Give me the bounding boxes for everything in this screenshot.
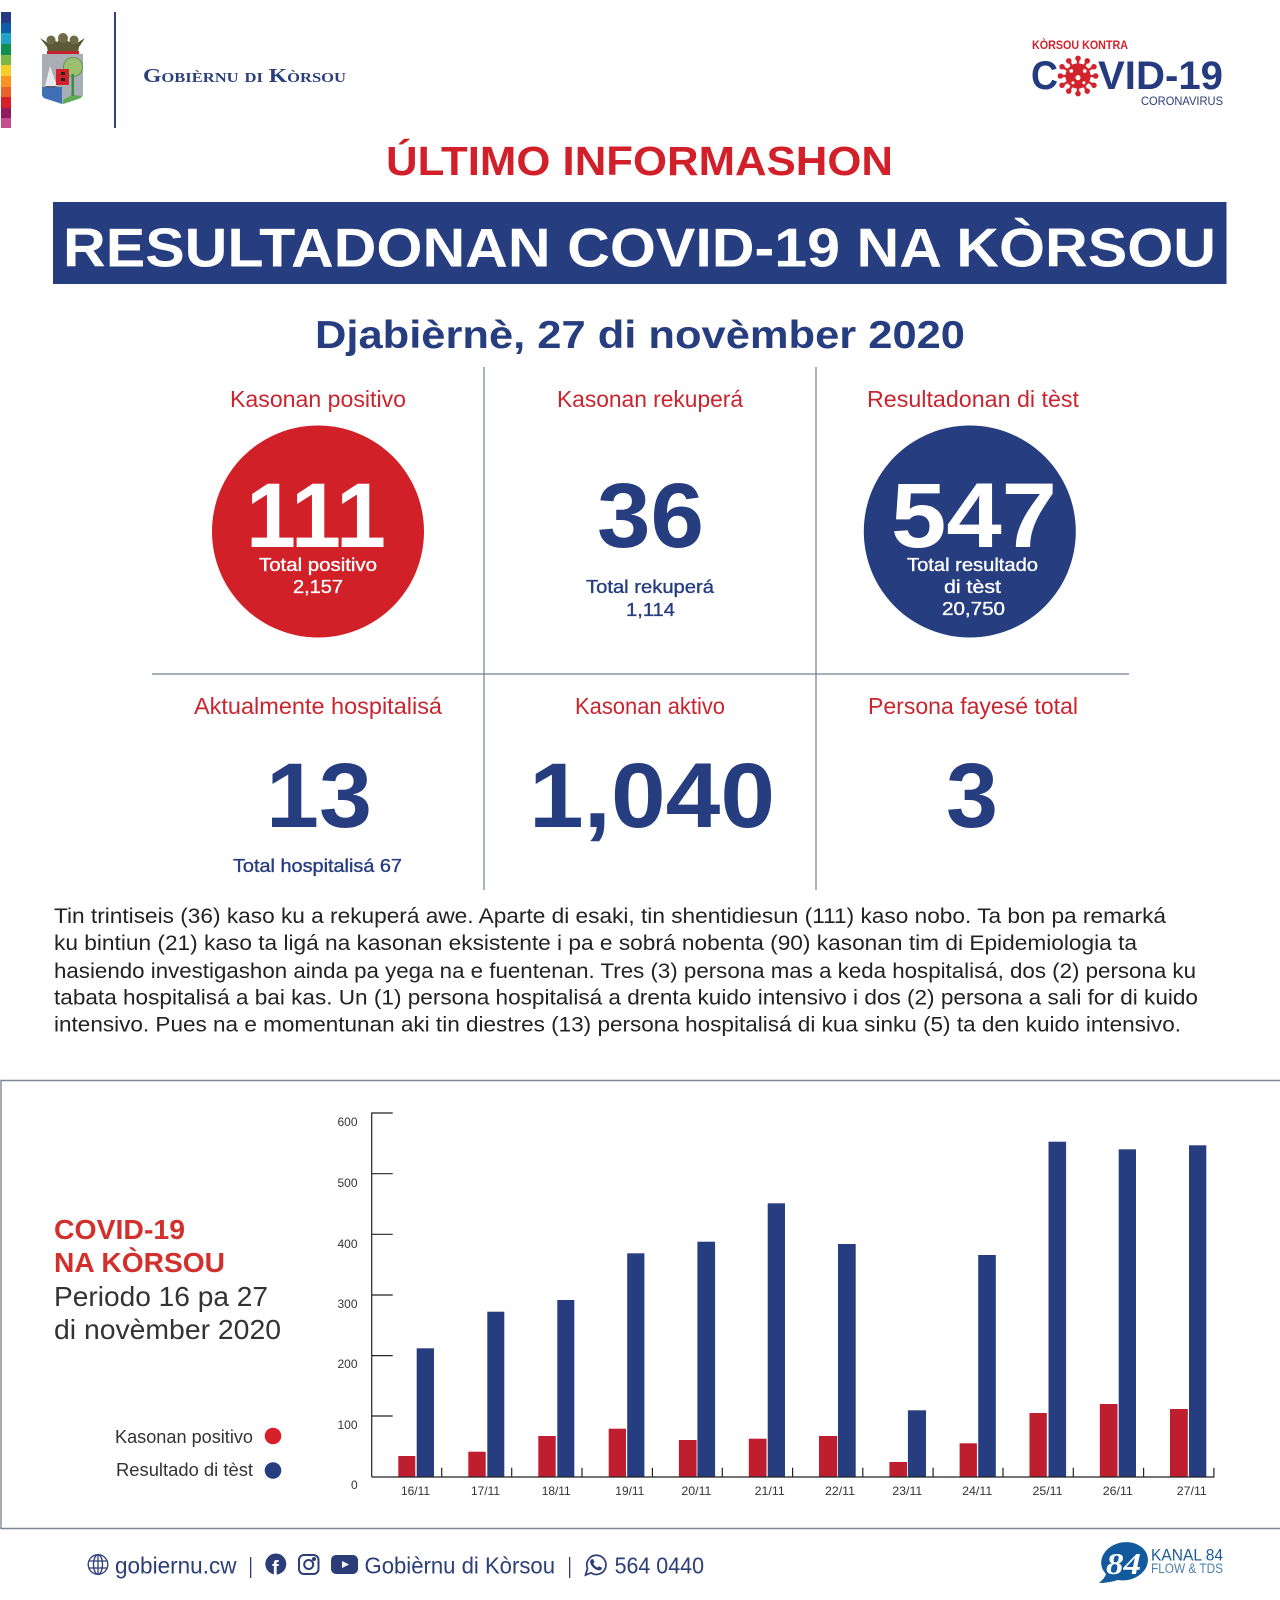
x axis labels: 19/11 <box>615 1484 645 1498</box>
icon: virus <box>1058 56 1098 96</box>
legend <box>115 1427 281 1480</box>
icon: youtube <box>331 1555 358 1574</box>
y axis labels: 400 <box>338 1237 358 1251</box>
y axis labels: 200 <box>338 1357 358 1371</box>
x axis labels: 26/11 <box>1103 1484 1133 1498</box>
stat: resultadonan di tèst: Total resultado <box>907 555 1038 575</box>
logo: Kanal 84: FLOW & TDS <box>1151 1561 1223 1576</box>
chart heading: COVID-19 <box>54 1214 185 1245</box>
x axis labels: 23/11 <box>892 1484 923 1498</box>
logo: Kanal 84 <box>1099 1542 1223 1583</box>
stat: kasonan aktivo: 1,040 <box>529 745 775 847</box>
x axis labels: 16/11 <box>401 1484 430 1498</box>
phone number: 564 0440 <box>615 1552 704 1578</box>
stat: kasonan positivo: 111 <box>246 465 386 567</box>
y axis labels: 0 <box>351 1478 358 1492</box>
legend: Resultado di tèst <box>116 1460 253 1480</box>
stat: persona fayesé total: 3 <box>946 745 998 847</box>
x axis labels: 25/11 <box>1032 1484 1063 1498</box>
summary paragraph: ku bintiun (21) kaso ta ligá na kasonan eksistente i pa e sobrá nobenta (90) kasonan tim di Epidemiologia ta <box>54 932 1137 955</box>
x axis labels: 22/11 <box>825 1484 855 1498</box>
stat: kasonan rekuperá: Total rekuperá <box>586 577 715 597</box>
footer contacts <box>88 1552 704 1580</box>
icon: whatsapp <box>586 1555 606 1575</box>
stat: kasonan positivo: 2,157 <box>293 577 343 597</box>
chart heading: di novèmber 2020 <box>54 1314 281 1345</box>
x axis labels: 27/11 <box>1177 1484 1207 1498</box>
stat: kasonan aktivo: Kasonan aktivo <box>575 693 725 719</box>
y axis <box>372 1112 393 1477</box>
icon: globe <box>88 1555 108 1574</box>
x axis labels: 18/11 <box>542 1484 571 1498</box>
stat grid lines <box>152 367 1129 890</box>
x axis labels: 21/11 <box>755 1484 785 1498</box>
summary paragraph <box>54 905 1198 1036</box>
icon: facebook <box>265 1554 286 1580</box>
bars: kasonan positivo <box>398 1404 1188 1477</box>
stat: resultadonan di tèst: 547 <box>891 465 1057 567</box>
stat: aktualmente hospitalisá: Total hospitalisá 67 <box>233 856 402 876</box>
x axis labels <box>401 1484 1207 1498</box>
banner: RESULTADONAN COVID-19 NA KÒRSOU <box>63 216 1216 278</box>
stat: resultadonan di tèst: 20,750 <box>942 599 1005 619</box>
banner <box>53 202 1226 284</box>
logo: Kòrsou kontra COVID-19: KÒRSOU KONTRA <box>1032 39 1128 52</box>
stat: kasonan rekuperá: 1,114 <box>626 600 675 620</box>
title: ÚLTIMO INFORMASHON <box>386 138 893 184</box>
website: gobiernu.cw <box>115 1552 237 1578</box>
stat: aktualmente hospitalisá: Aktualmente hospitalisá <box>194 693 442 719</box>
header divider <box>114 12 116 128</box>
chart heading: Periodo 16 pa 27 <box>54 1281 268 1312</box>
y axis labels: 100 <box>338 1418 358 1432</box>
stat: kasonan positivo: Total positivo <box>259 555 377 575</box>
legend: Kasonan positivo <box>115 1427 253 1447</box>
y axis labels <box>338 1115 358 1492</box>
chart heading <box>54 1214 281 1345</box>
bar chart <box>338 1112 1214 1498</box>
x axis labels: 17/11 <box>471 1484 500 1498</box>
social account: Gobièrnu di Kòrsou <box>364 1552 555 1578</box>
stat: kasonan positivo: Kasonan positivo <box>230 386 406 412</box>
logo: Kòrsou kontra COVID-19: VID-19 <box>1098 54 1223 98</box>
date heading: Djabièrnè, 27 di novèmber 2020 <box>315 314 965 357</box>
stat: resultadonan di tèst: di tèst <box>944 577 1001 597</box>
summary paragraph: hasiendo investigashon ainda pa yega na e fuentenan. Tres (3) persona mas a keda hospitalisá, dos (2) persona ku <box>54 960 1196 983</box>
panel: chart section frame <box>1 1080 1280 1528</box>
stat: kasonan rekuperá: Kasonan rekuperá <box>557 386 743 412</box>
chart heading: NA KÒRSOU <box>54 1247 225 1278</box>
logo: Kòrsou kontra COVID-19: CORONAVIRUS <box>1141 96 1223 108</box>
x axis <box>372 1468 1214 1477</box>
stat: resultadonan di tèst: Resultadonan di tèst <box>867 386 1080 412</box>
colour strip <box>1 12 11 128</box>
x axis labels: 20/11 <box>681 1484 712 1498</box>
logo: Kòrsou kontra COVID-19: C <box>1031 54 1058 98</box>
logo: Kòrsou kontra COVID-19 <box>1031 39 1223 108</box>
stat: aktualmente hospitalisá: 13 <box>266 745 372 847</box>
stat: persona fayesé total <box>868 693 1078 847</box>
stat: kasonan rekuperá <box>557 386 743 620</box>
icon: instagram <box>299 1555 318 1574</box>
x axis labels: 24/11 <box>962 1484 993 1498</box>
stat: kasonan positivo <box>212 386 424 638</box>
logo: Kanal 84: 84 <box>1106 1546 1141 1581</box>
y axis labels: 600 <box>338 1115 358 1129</box>
y axis labels: 300 <box>338 1297 358 1311</box>
separator <box>569 1557 570 1578</box>
government name: Gobièrnu di Kòrsou <box>143 65 346 87</box>
bars: resultado di tèst <box>417 1142 1206 1477</box>
icon: coat of arms <box>40 33 85 104</box>
logo: Kanal 84: KANAL 84 <box>1151 1546 1223 1564</box>
stat: persona fayesé total: Persona fayesé total <box>868 693 1078 719</box>
separator <box>250 1557 251 1578</box>
summary paragraph: tabata hospitalisá a bai kas. Un (1) persona hospitalisá a drenta kuido intensivo i dos (2) persona a sali for di kuido <box>54 986 1198 1010</box>
stat: kasonan aktivo <box>529 693 775 847</box>
icon: facebook: f <box>272 1558 279 1580</box>
y axis labels: 500 <box>338 1176 358 1190</box>
stat: resultadonan di tèst <box>864 386 1080 638</box>
summary paragraph: Tin trintiseis (36) kaso ku a rekuperá awe. Aparte di esaki, tin shentidiesun (111) kaso nobo. Ta bon pa remarká <box>54 905 1166 928</box>
stat: kasonan rekuperá: 36 <box>597 465 704 567</box>
summary paragraph: intensivo. Pues na e momentunan aki tin diestres (13) persona hospitalisá di kua sinku (5) ta den kuido intensivo. <box>54 1014 1181 1036</box>
stat: aktualmente hospitalisá <box>194 693 442 876</box>
